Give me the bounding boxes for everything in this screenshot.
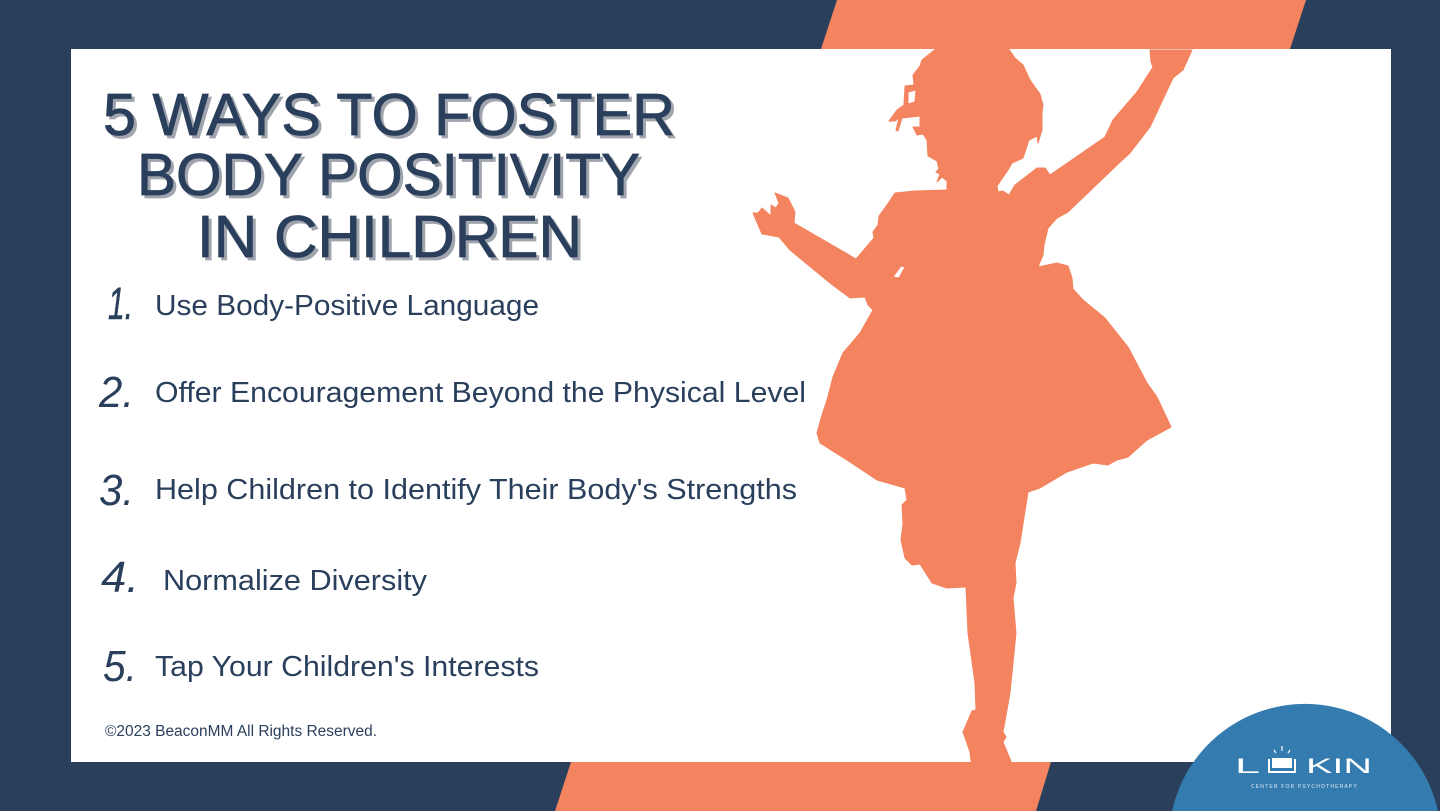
title (103, 82, 678, 273)
list item 2 (98, 368, 806, 417)
list item 4: Normalize Diversity (163, 565, 428, 597)
title text: IN CHILDREN (197, 204, 582, 270)
title shadow: BODY POSITIVITY (140, 145, 643, 211)
logo letter L: L (1235, 755, 1260, 778)
logo tagline: CENTER FOR PSYCHOTHERAPY (1251, 784, 1358, 790)
title text (103, 82, 675, 270)
title shadow (106, 85, 678, 273)
icon: sofa with rays (1269, 746, 1295, 772)
list item 1: 1. (108, 278, 133, 329)
list item 5 (103, 642, 539, 691)
title shadow: 5 WAYS TO FOSTER (106, 85, 678, 151)
title shadow: IN CHILDREN (200, 207, 585, 273)
blue logo circle (1172, 704, 1438, 811)
list item 1: Use Body-Positive Language (155, 290, 539, 322)
silhouette of a dancing girl (753, 50, 1192, 762)
title text: 5 WAYS TO FOSTER (103, 82, 675, 148)
logo letters KIN: KIN (1306, 755, 1372, 778)
list item 1 (108, 278, 539, 329)
list item 2: Offer Encouragement Beyond the Physical Level (155, 377, 806, 409)
list item 5: 5. (103, 642, 137, 691)
logo (1235, 746, 1372, 790)
copyright footer: ©2023 BeaconMM All Rights Reserved. (105, 723, 377, 740)
title text: BODY POSITIVITY (137, 142, 640, 208)
list item 2: 2. (98, 368, 134, 417)
orange diagonal band top (821, 0, 1306, 49)
list item 3: 3. (99, 466, 134, 515)
list item 3: Help Children to Identify Their Body's Strengths (155, 474, 797, 506)
list item 3 (99, 466, 797, 515)
list item 4 (101, 553, 428, 602)
orange diagonal band bottom (555, 762, 1051, 811)
list item 5: Tap Your Children's Interests (155, 651, 539, 683)
list item 4: 4. (101, 553, 139, 602)
